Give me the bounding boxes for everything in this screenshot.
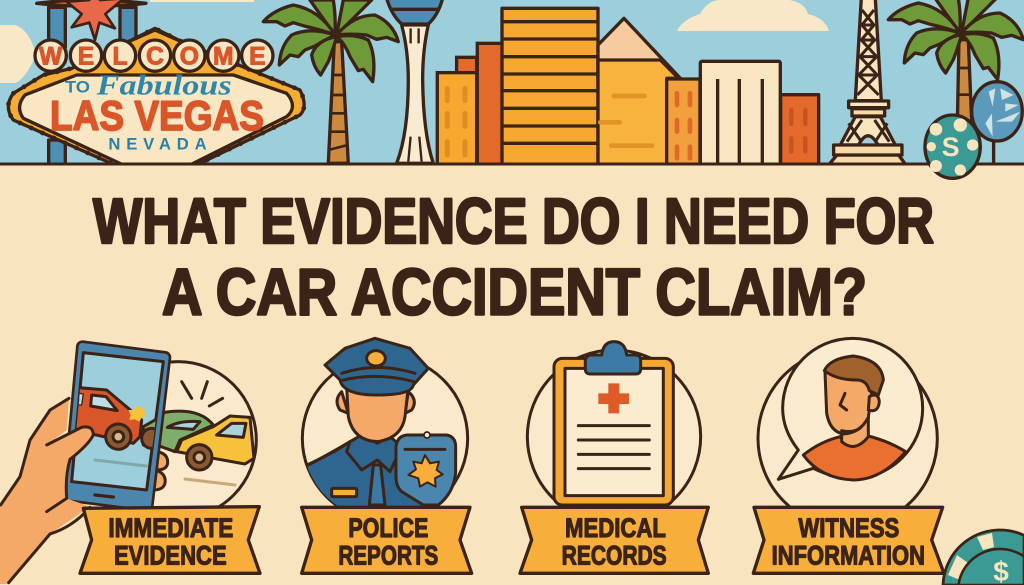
- cream columns block: [700, 61, 780, 165]
- scene circle: [100, 362, 256, 518]
- welcome letters: W: [39, 43, 63, 70]
- road line: [185, 479, 235, 485]
- banner text: [338, 513, 438, 570]
- green car in screen: [142, 418, 156, 447]
- nose and mouth: [840, 393, 861, 432]
- welcome letters: L: [112, 43, 128, 70]
- panel: immediate evidence: [0, 347, 260, 584]
- sign marquee: [8, 28, 304, 165]
- face: [825, 370, 872, 434]
- clip: [585, 342, 641, 374]
- las vegas sign: [8, 0, 304, 167]
- banner text: MEDICAL: [565, 513, 666, 543]
- shield star: [408, 455, 443, 487]
- teal chip: [925, 115, 980, 178]
- phone body: [68, 347, 165, 506]
- title line 2: A CAR ACCIDENT CLAIM?: [162, 256, 867, 328]
- banner: [520, 507, 708, 573]
- welcome letters: [38, 46, 266, 65]
- tie: [369, 465, 385, 505]
- circle: [527, 350, 701, 523]
- hair: [824, 356, 883, 395]
- left cloud: [0, 25, 36, 83]
- panel: police reports: [302, 338, 472, 573]
- impact star: [128, 405, 147, 422]
- hat badge: [367, 351, 385, 366]
- casino buildings: [437, 43, 503, 166]
- hand: [0, 398, 90, 584]
- skyline illustration: [0, 0, 1023, 167]
- face: [347, 387, 408, 442]
- top sliver cloud: [150, 0, 254, 2]
- chip rim: [943, 530, 1024, 585]
- fabulous script: Fabulous: [95, 70, 232, 101]
- banner text: EVIDENCE: [114, 540, 227, 570]
- collar: [347, 435, 402, 472]
- welcome letters: O: [180, 43, 199, 70]
- post: [989, 133, 999, 163]
- las vegas: LAS VEGAS: [50, 92, 264, 139]
- screen road: [95, 460, 147, 466]
- chips right: [925, 82, 1022, 178]
- banner: [753, 507, 944, 573]
- centre cloud: [677, 0, 829, 31]
- welcome letters: E: [249, 43, 266, 70]
- gold block: [437, 73, 477, 166]
- small orange block: [454, 56, 476, 71]
- ear: [868, 395, 879, 411]
- striped tower: [502, 8, 598, 165]
- welcome letters: M: [213, 43, 234, 70]
- welcome letters: E: [78, 43, 94, 70]
- nevada: NEVADA: [108, 135, 207, 154]
- thumb: [47, 427, 93, 512]
- chip centre: [958, 549, 1024, 585]
- sign chevron: [128, 30, 182, 42]
- banner text: [772, 513, 925, 570]
- tall orange block: [477, 43, 503, 165]
- banner text: [108, 513, 233, 570]
- paper: [565, 368, 663, 496]
- phone home button: [95, 495, 113, 497]
- orange windows block: [667, 79, 700, 165]
- clipboard: [554, 358, 673, 505]
- banner text: IMMEDIATE: [108, 513, 233, 543]
- blue chip: [972, 82, 1022, 141]
- uniform: [306, 440, 422, 506]
- banner text: INFORMATION: [772, 540, 925, 570]
- fingers behind phone: [153, 452, 168, 490]
- record lines: [578, 426, 649, 469]
- banner text: [562, 513, 667, 570]
- right buildings: [502, 0, 906, 165]
- green car: [142, 411, 213, 452]
- ground line: [0, 162, 1024, 166]
- to: TO: [65, 77, 90, 96]
- shield badge: [396, 435, 456, 505]
- panel: witness information: [753, 338, 944, 573]
- banner text: POLICE: [348, 513, 428, 543]
- medical cross: [598, 383, 629, 413]
- outer circle: [758, 349, 937, 528]
- pyramid hotel: [598, 60, 679, 165]
- banner text: RECORDS: [562, 540, 667, 570]
- shirt: [803, 436, 906, 480]
- panel: medical records: [520, 342, 708, 573]
- sign starburst: [67, 0, 124, 40]
- eiffel tower: [829, 0, 906, 165]
- welcome bulbs: [35, 40, 273, 71]
- pyramid: [598, 18, 680, 78]
- yellow car: [177, 416, 254, 464]
- sign top bar: [37, 0, 146, 6]
- chip edge marks: [948, 533, 1024, 580]
- banner text: WITNESS: [798, 513, 899, 543]
- chips right: S: [942, 132, 960, 162]
- circle: [302, 356, 468, 521]
- spark lines: [182, 382, 223, 406]
- stratosphere tower: [387, 0, 443, 163]
- red car: [67, 387, 142, 443]
- red orange block: [781, 95, 819, 165]
- police hat: [325, 338, 428, 395]
- neck: [842, 413, 868, 446]
- banner: [302, 507, 472, 573]
- banner: [80, 507, 260, 573]
- ears: [337, 392, 414, 413]
- sky: [0, 0, 1024, 164]
- sign posts: [49, 7, 136, 167]
- poker chip bottom right: [943, 530, 1024, 585]
- title: [93, 185, 934, 328]
- palm tree right: [886, 0, 1024, 121]
- phone outline: [68, 347, 165, 506]
- phone screen: [72, 353, 163, 490]
- banner text: REPORTS: [338, 540, 438, 570]
- speech bubble: [778, 338, 923, 479]
- palm tree left: [263, 0, 398, 163]
- name tag: [332, 488, 357, 497]
- welcome letters: C: [146, 43, 164, 70]
